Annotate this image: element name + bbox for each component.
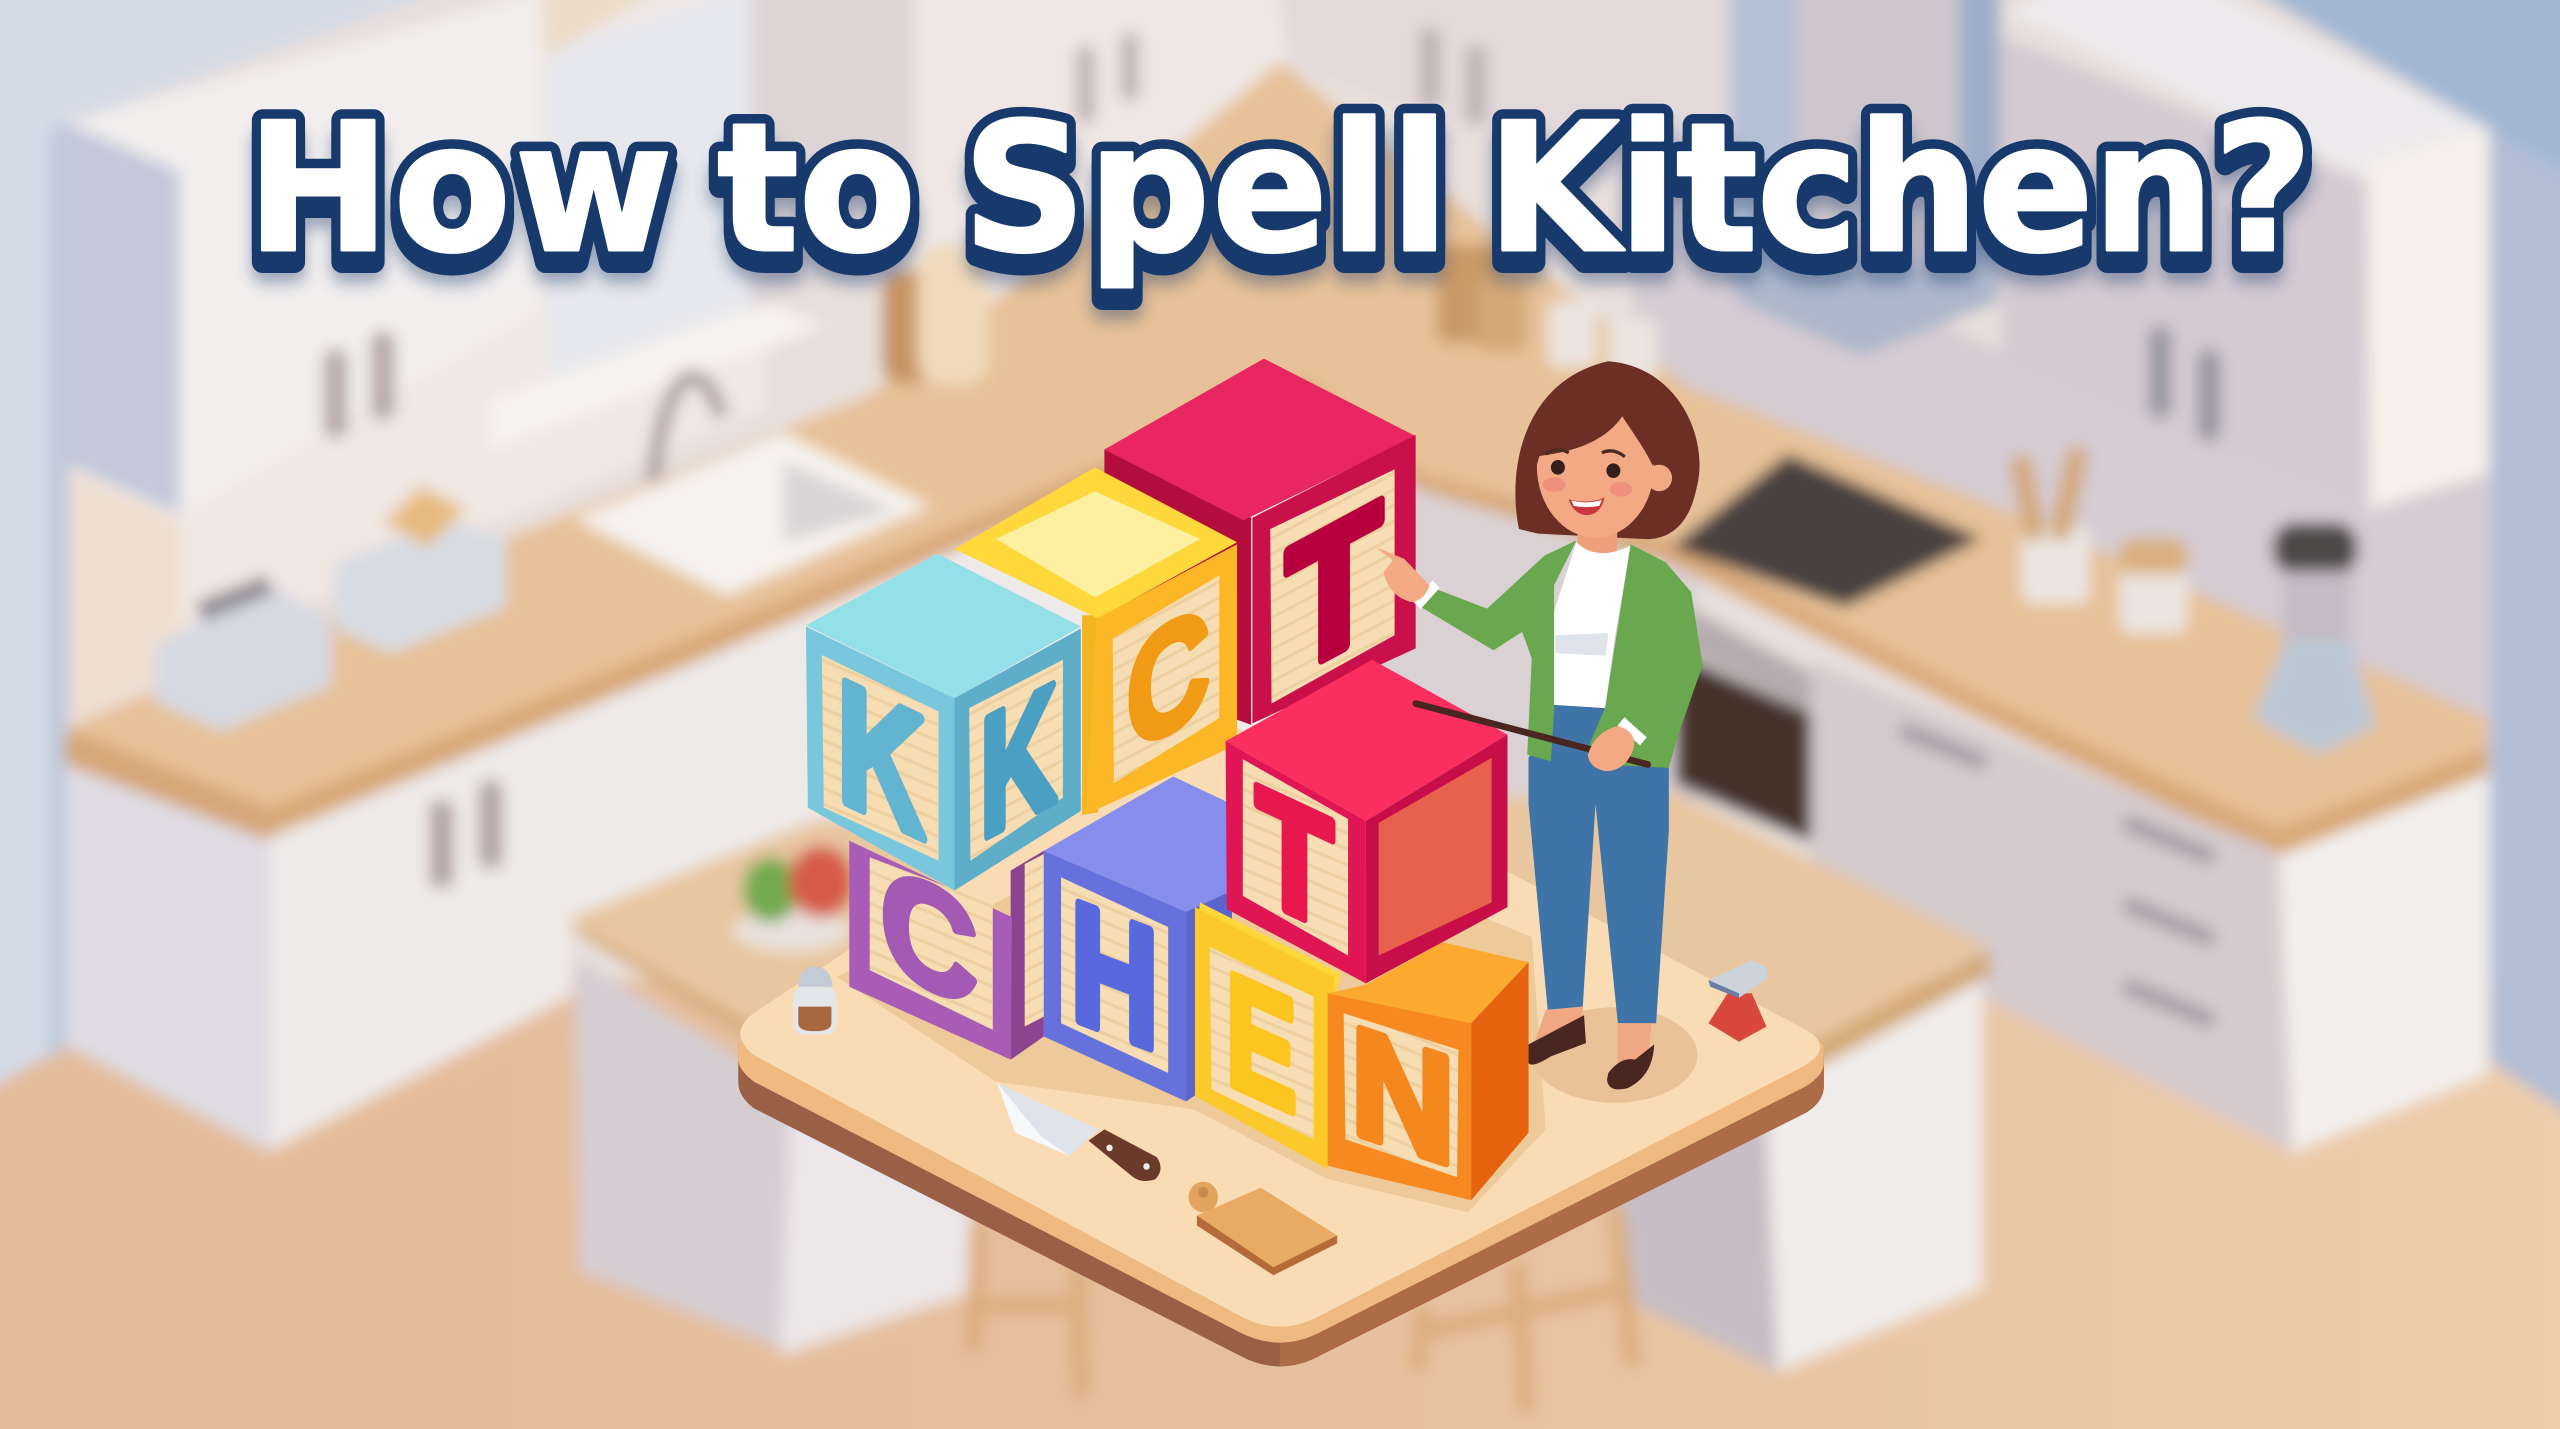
neck: [1578, 519, 1617, 559]
salt shaker: [793, 967, 837, 1034]
foreground scene: [738, 359, 1824, 1366]
title face: to: [717, 86, 916, 293]
cutting board: [1189, 1182, 1337, 1275]
block: K cyan: K: [837, 641, 925, 876]
sink: [575, 377, 931, 596]
title outline: Spell: [963, 86, 1451, 293]
holding hand: [1588, 726, 1634, 771]
title outline: Kitchen?: [1487, 86, 2312, 293]
block: N orange: N: [1351, 994, 1455, 1199]
title soft shadow: Spell: [963, 108, 1451, 315]
block: K cyan: K: [980, 647, 1056, 875]
ear: [1647, 465, 1672, 491]
shirt: [1554, 542, 1631, 708]
title outline: How: [247, 86, 677, 293]
block: C purple: [849, 833, 1044, 1060]
cardigan left: [1418, 540, 1576, 761]
title extrusion: Spell: [963, 98, 1451, 305]
tabletop board: [738, 711, 1824, 1366]
title face: Kitchen?: [1487, 86, 2312, 293]
person shadow: [1532, 1007, 1698, 1103]
lower cabinets right: [1811, 661, 2488, 1153]
title extrusion: Kitchen?: [1487, 98, 2312, 305]
upper cabinet left: [65, 0, 539, 514]
face: [1537, 394, 1654, 538]
lower cabinets left: [65, 650, 735, 1151]
pants: [1529, 703, 1669, 1023]
feet: [1529, 1007, 1654, 1089]
upper cabinet right: [2002, 0, 2488, 509]
pointer stick: [1416, 703, 1648, 765]
cardigan right: [1589, 544, 1703, 768]
countertop: [65, 62, 2488, 859]
teeth: [1571, 500, 1602, 507]
red knife block: [1708, 960, 1768, 1042]
floor: [0, 980, 2560, 1429]
toasters: [155, 487, 506, 731]
block shadow: [837, 804, 1546, 1212]
cuffs: [1417, 584, 1643, 741]
fruit bowl: [733, 846, 854, 952]
block: E yellow: [1195, 902, 1340, 1169]
blender and jars: [2021, 457, 2376, 754]
island: [567, 792, 1990, 1371]
bangs: [1531, 373, 1663, 483]
person: [1375, 361, 1703, 1089]
upper cabinets centre: [751, 0, 1731, 351]
title extrusion: How: [247, 98, 677, 305]
title extrusion: to: [717, 98, 916, 305]
block: N orange: [1328, 942, 1529, 1200]
block: T red front: T: [1256, 752, 1333, 966]
counter items: [882, 245, 1657, 385]
block: E yellow: E: [1226, 938, 1297, 1148]
hair back: [1515, 361, 1700, 539]
title soft shadow: Kitchen?: [1487, 108, 2312, 315]
block: back T: [1104, 359, 1416, 725]
block: K cyan: [806, 554, 1081, 891]
range hood: [1729, 0, 2000, 356]
title outline: to: [717, 86, 916, 293]
stools: [973, 1207, 1633, 1412]
centre cabinets: [727, 376, 1698, 898]
left wall: [0, 0, 555, 1110]
block: C purple: C: [881, 833, 977, 1041]
title face: Spell: [963, 86, 1451, 293]
block: H blue: [1044, 776, 1232, 1101]
block: H blue: H: [1071, 864, 1158, 1086]
right wall: [2188, 0, 2560, 1143]
title soft shadow: How: [247, 108, 677, 315]
title face: How: [247, 86, 677, 293]
title soft shadow: to: [717, 108, 916, 315]
oven: [1675, 607, 1811, 842]
cooktop: [1672, 454, 1982, 607]
block: C yellow: C: [1127, 571, 1210, 787]
title: [247, 86, 2312, 315]
block: back T: T: [1286, 462, 1382, 718]
block: T red front: [1226, 660, 1508, 983]
eyes: [1546, 450, 1625, 478]
knife: [997, 1083, 1161, 1181]
back wall: [73, 0, 2488, 735]
cheeks: [1543, 477, 1633, 497]
smile: [1569, 498, 1604, 515]
pointing hand: [1375, 547, 1430, 602]
block: C yellow: [955, 467, 1237, 815]
